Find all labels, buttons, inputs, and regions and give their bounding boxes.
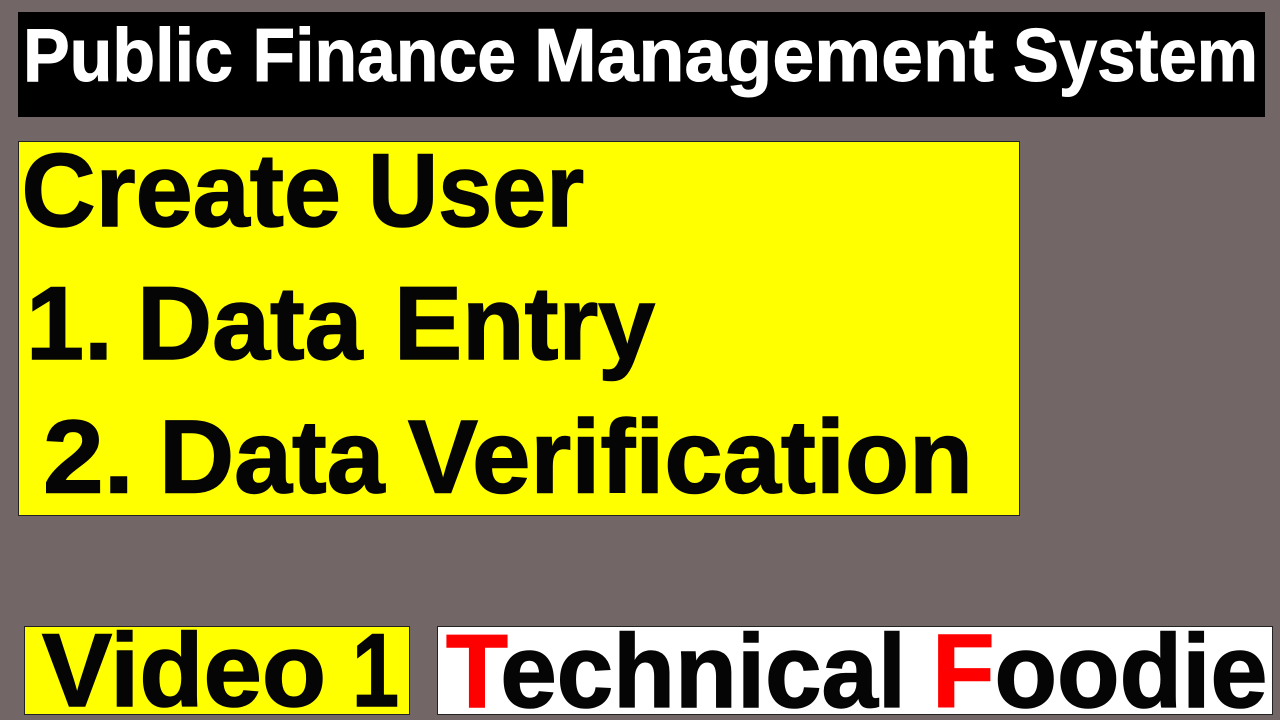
panel: topic list — [18, 133, 1020, 516]
title text: Finance — [252, 13, 516, 97]
title text — [23, 13, 1258, 97]
list item 2: 2. — [43, 400, 134, 516]
list item 1 — [26, 266, 655, 382]
list item 2 — [43, 400, 973, 516]
video number badge — [24, 613, 410, 720]
title text: Management — [534, 13, 994, 97]
title text: Public — [23, 13, 233, 97]
list item 2: Data — [159, 400, 386, 516]
list item 1: 1. — [26, 266, 113, 382]
list item 1: Data — [137, 266, 364, 382]
title banner — [18, 12, 1265, 117]
list item 2: Verification — [408, 400, 973, 516]
heading: create user: User — [368, 133, 584, 249]
channel name badge — [438, 614, 1272, 720]
list item 1: Entry — [394, 266, 655, 382]
title text: System — [1013, 13, 1258, 97]
channel name text — [446, 614, 1268, 720]
heading: create user: Create — [22, 133, 341, 249]
heading: create user — [22, 133, 584, 249]
